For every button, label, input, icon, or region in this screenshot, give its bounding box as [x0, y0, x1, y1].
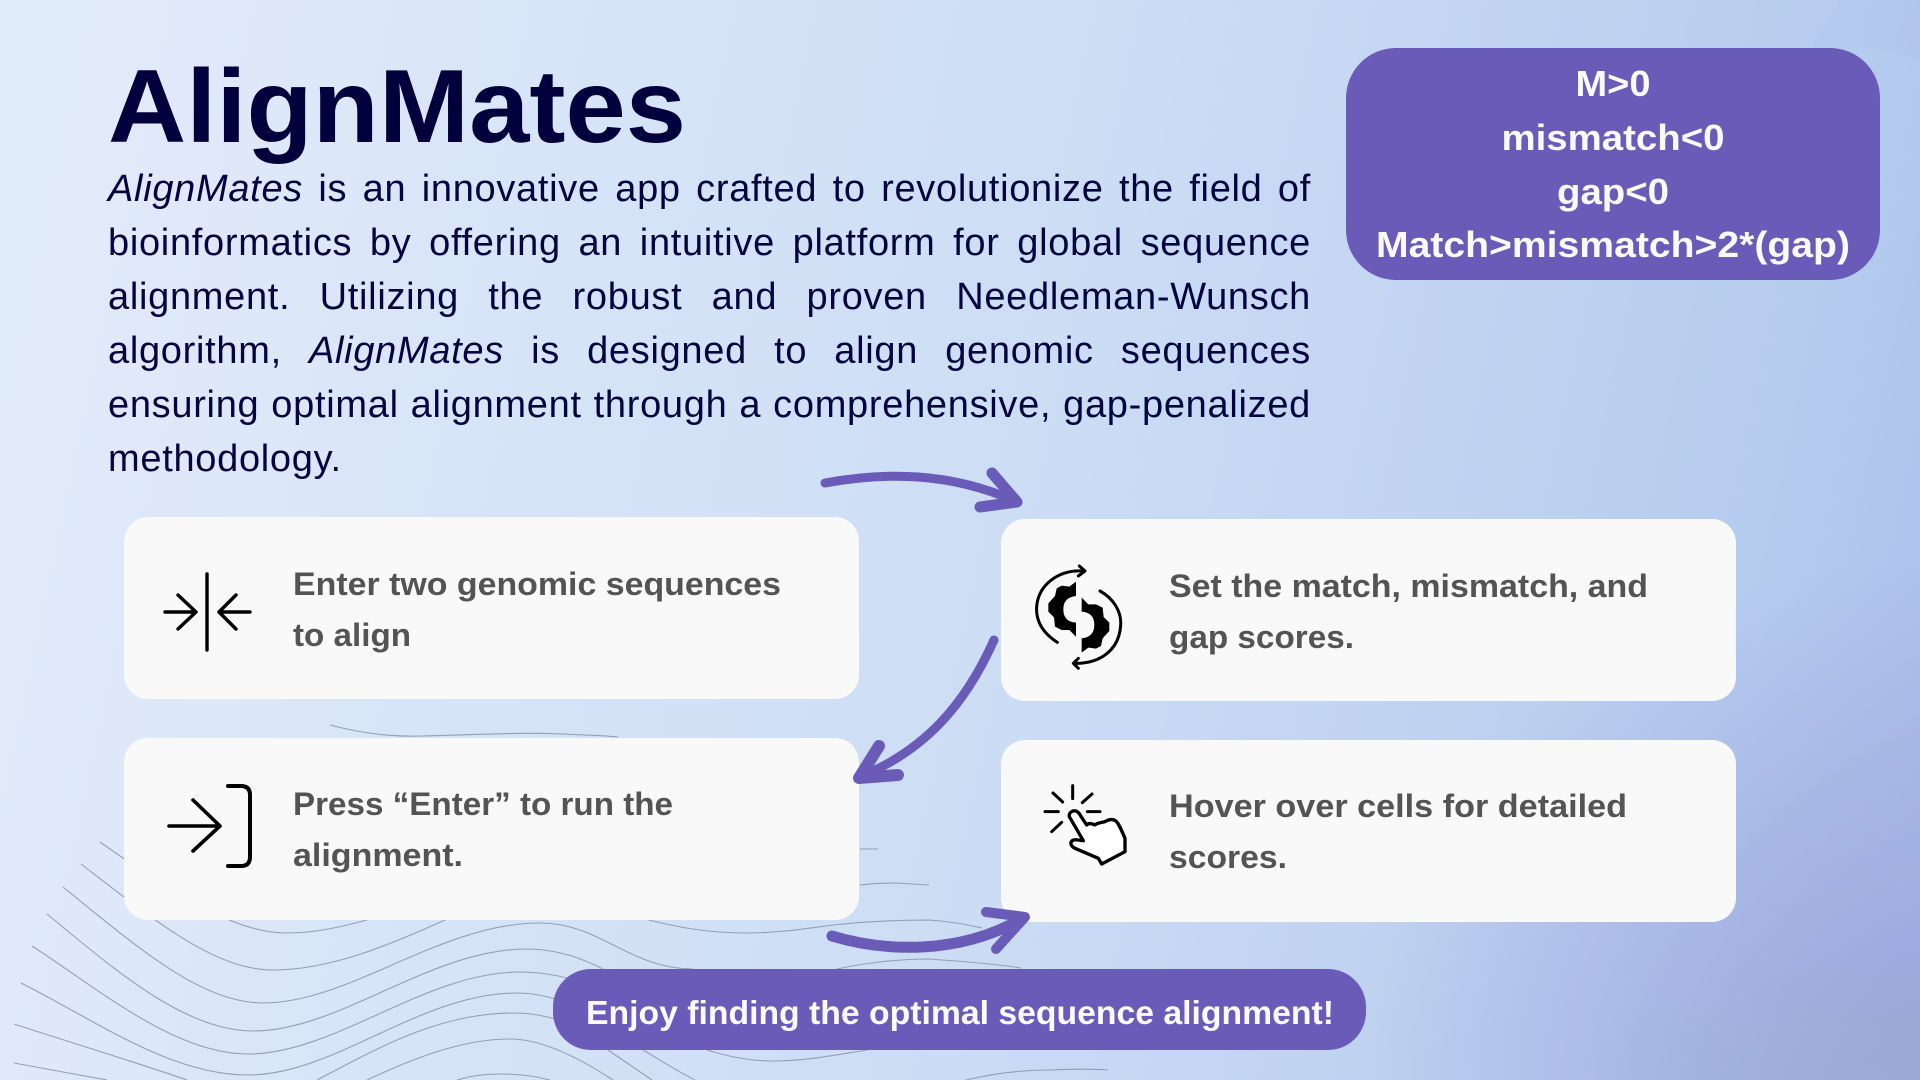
panel: step 4 hover cells	[1001, 740, 1736, 922]
panel: step 4 hover cells: Hover over cells for detailed	[1169, 788, 1627, 824]
text block: description paragraph: bioinformatics by offering an intuitive platform for global sequence	[108, 222, 1311, 264]
panel: step 3 press enter	[124, 738, 859, 920]
panel: scoring rules: gap<0	[1557, 171, 1669, 212]
text block: description paragraph: algorithm, AlignMates is designed to align genomic sequences	[108, 330, 1311, 372]
panel: scoring rules	[1346, 48, 1880, 280]
panel: scoring rules: mismatch<0	[1502, 117, 1724, 158]
icon: gears with cycle arrows	[1037, 566, 1121, 668]
text block: description paragraph: ensuring optimal alignment through a comprehensive, gap-penalized	[108, 384, 1311, 426]
panel: step 1 enter sequences	[124, 517, 859, 699]
arrow: step 1 to step 2	[825, 473, 1017, 507]
panel: scoring rules: M>0	[1576, 63, 1650, 104]
panel: step 2 set scores: gap scores.	[1169, 619, 1354, 655]
panel: step 3 press enter: alignment.	[293, 837, 463, 873]
text block: description paragraph: methodology.	[108, 438, 342, 480]
text block: description paragraph: alignment. Utilizing the robust and proven Needleman-Wunsch	[108, 276, 1311, 318]
text block: description paragraph	[106, 168, 1311, 480]
icon: clicking hand	[1045, 786, 1125, 864]
callout: closing message	[553, 969, 1366, 1050]
panel: step 1 enter sequences: to align	[293, 617, 411, 653]
panel: step 1 enter sequences: Enter two genomic sequences	[293, 566, 781, 602]
panel: step 2 set scores	[1001, 519, 1736, 701]
title: AlignMates	[108, 49, 686, 165]
icon: enter arrow with bracket	[169, 786, 250, 866]
panel: step 2 set scores: Set the match, mismatch, and	[1169, 568, 1648, 604]
panel: step 3 press enter: Press “Enter” to run the	[293, 786, 673, 822]
panel: scoring rules: Match>mismatch>2*(gap)	[1376, 224, 1850, 265]
arrow: step 2 to step 3	[859, 640, 994, 778]
icon: align arrows	[165, 574, 250, 650]
arrow: step 3 to step 4	[832, 912, 1025, 949]
text block: description paragraph: AlignMates is an innovative app crafted to revolutionize the field of	[108, 168, 1311, 210]
callout: closing message: Enjoy finding the optimal sequence alignment!	[586, 994, 1334, 1031]
panel: step 4 hover cells: scores.	[1169, 839, 1287, 875]
